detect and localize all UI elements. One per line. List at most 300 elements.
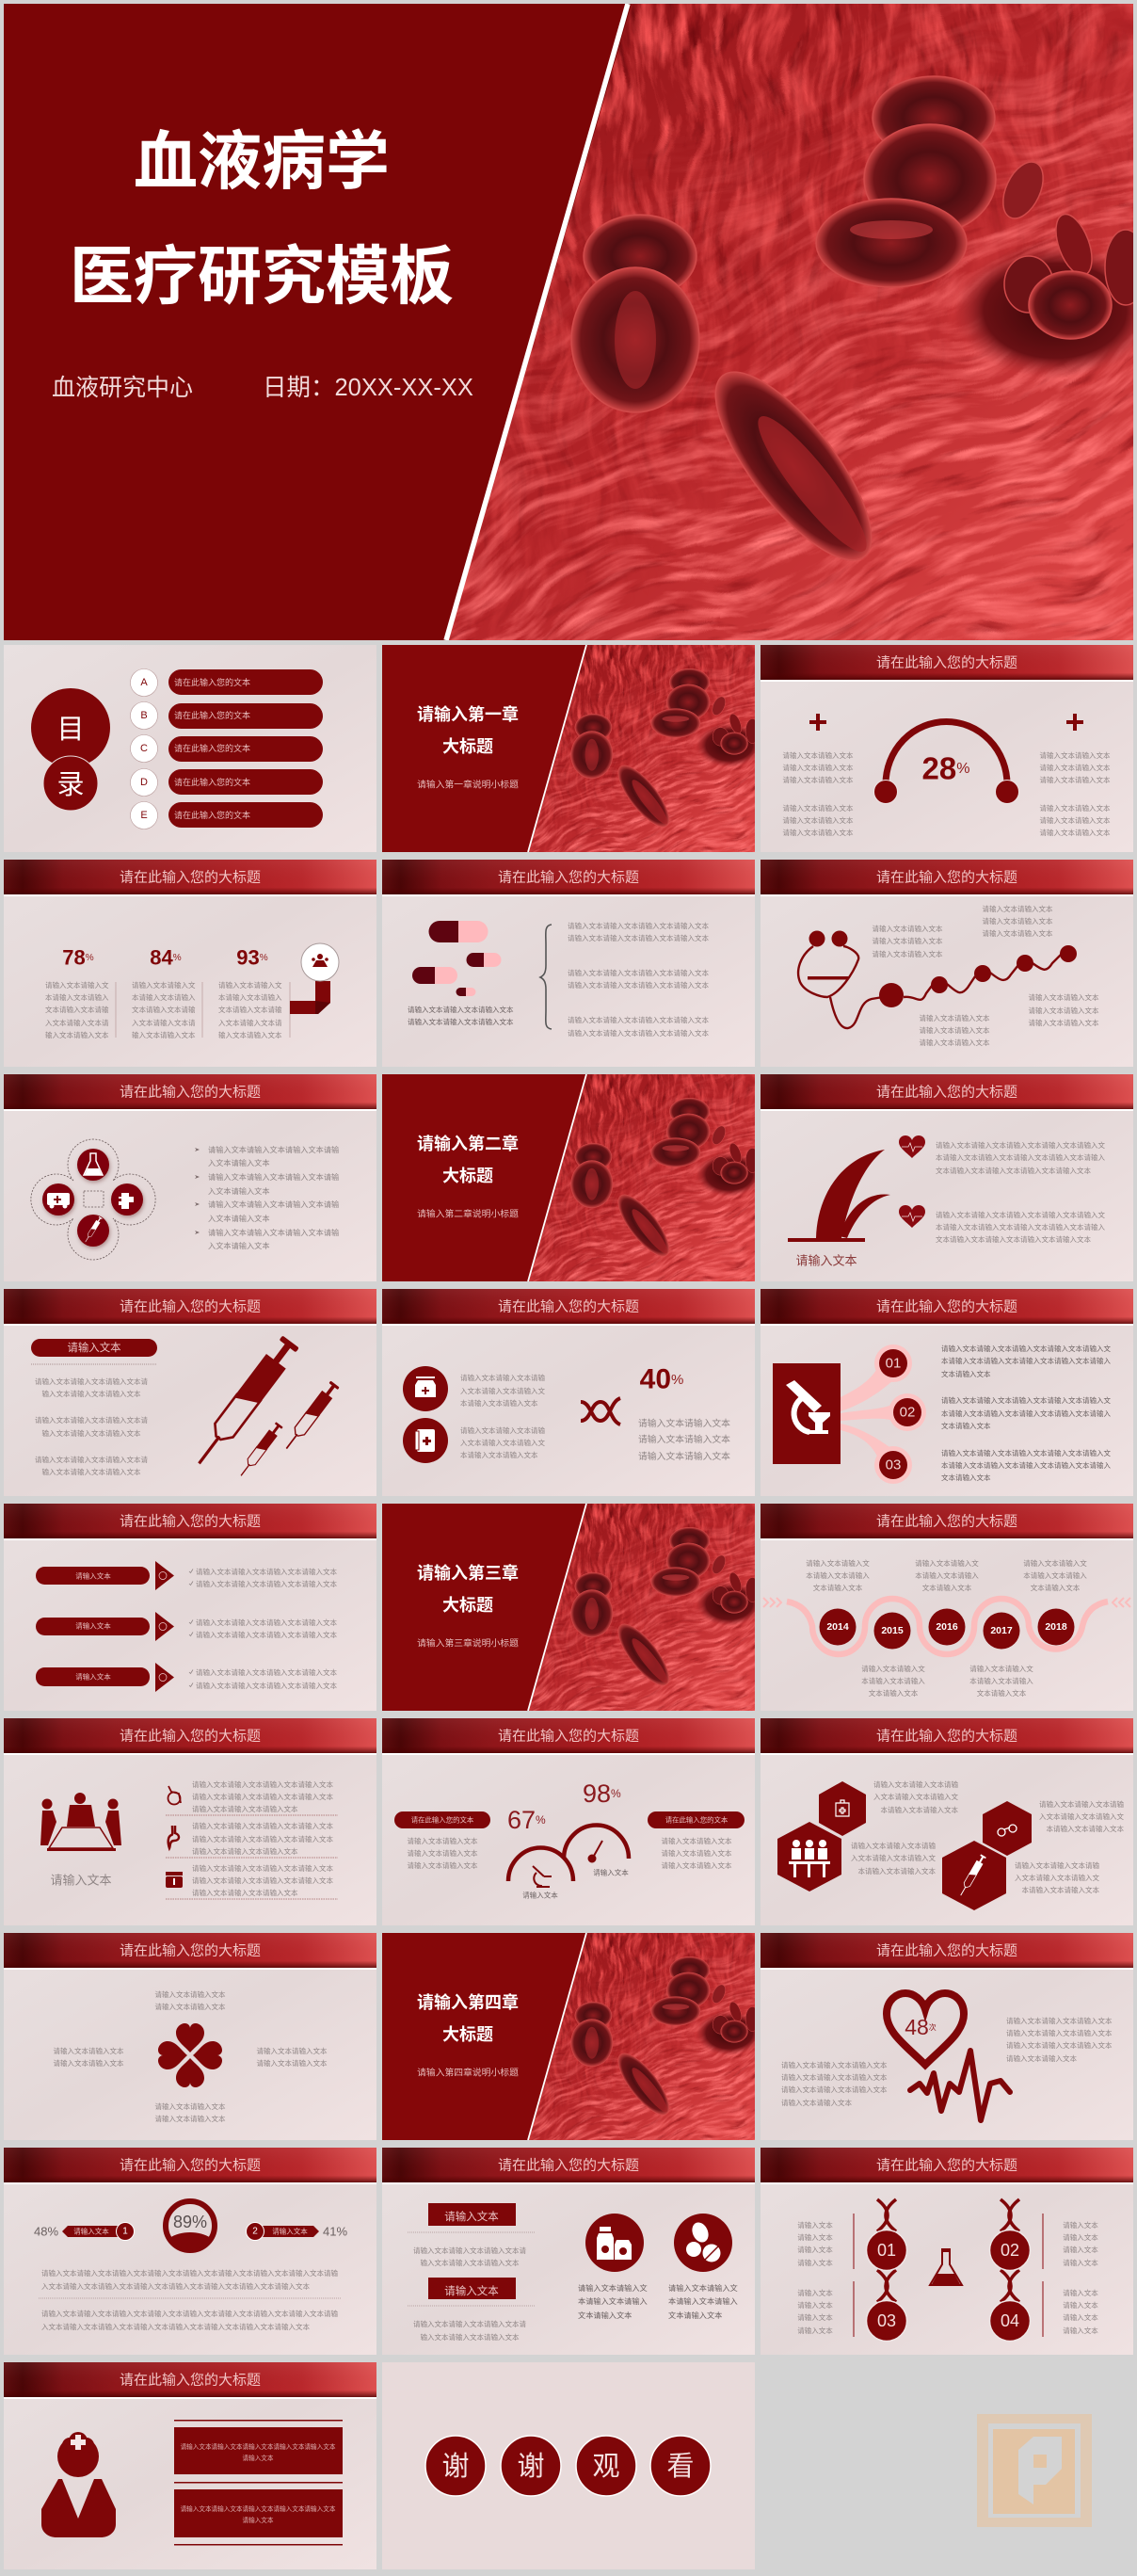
text panel 1: 请输入文本 [243, 2454, 274, 2461]
ribbons [877, 2199, 1019, 2302]
text block 2: 请输入文本请输入文本 [983, 904, 1053, 913]
pills: 请输入文本 [75, 1621, 111, 1631]
text with checks: 请输入文本请输入文本请输入文本请输入文本 [196, 1567, 337, 1576]
text 1: 输入文本请输入文本请输入文本 [420, 2258, 520, 2267]
contents list: 请在此输入您的文本 [174, 710, 250, 720]
header bar: 请在此输入您的大标题 [498, 1729, 639, 1744]
thank-you circles: 谢 [517, 2451, 545, 2482]
text 2: 请输入文本请输入文本请输入文本请 [413, 2318, 526, 2327]
chapter subtitle: 请输入第三章说明小标题 [417, 1636, 519, 1650]
column text [45, 979, 282, 1039]
plus icons [809, 714, 1083, 731]
bottom text: 请输入文本请输入文本 [154, 2113, 226, 2122]
top text: 请输入文本请输入文 [915, 1557, 979, 1567]
percentages: 84% [150, 945, 182, 970]
top text: 本请输入文本请输入 [1023, 1570, 1087, 1580]
label pill: 请输入文本 [68, 1341, 120, 1354]
left text: 请输入文本请输入文本 [407, 1847, 478, 1857]
text with checks: 请输入文本请输入文本请输入文本请输入文本 [196, 1618, 337, 1627]
text: 本请输入文本请输入文本请输入文本请输入文本请输入 [941, 1459, 1111, 1469]
text 2: 输入文本请输入文本请输入文本 [420, 2331, 520, 2341]
header bar: 请在此输入您的大标题 [876, 1729, 1017, 1744]
header bar [761, 860, 1133, 896]
top text: 文本请输入文本 [922, 1582, 972, 1591]
slide: 40 percent [382, 1289, 755, 1496]
bottom text: 文本请输入文本 [869, 1687, 919, 1697]
top text: 文本请输入文本 [813, 1582, 863, 1591]
caption 2: 本请输入文本请输入 [668, 2295, 738, 2305]
percent value: 40% [640, 1363, 683, 1395]
slide: table of contents [4, 645, 376, 852]
caption: 请输入文本请输入文本请输入文本 [408, 1004, 514, 1013]
text panel 1 [174, 2420, 343, 2484]
text panel 2 [174, 2489, 343, 2546]
text: 输入文本请输入文本请输入文本 [41, 1427, 141, 1437]
text: 请输入文本请输入文本请输入文本 [192, 1887, 298, 1896]
slide: clover [4, 1933, 376, 2140]
left text: 请输入文本请输入文本 [783, 749, 854, 759]
contents list: 请在此输入您的文本 [174, 677, 250, 687]
text 1: 请输入文本请输入文本请输入文本请输入文本请输入文 [936, 1139, 1105, 1149]
medal circles: 04 [1001, 2311, 1019, 2330]
contents list [130, 668, 323, 829]
icon: heart 2 [899, 1205, 925, 1228]
text: 文本请输入文本 [941, 1420, 991, 1429]
header bar [761, 2148, 1133, 2184]
right text: 请输入文本请输入文本 [661, 1847, 732, 1857]
paragraph 2: 入文本请输入文本请输入文本请输入文本请输入文本请输入文本请输入文本请输入文本 [41, 2322, 310, 2331]
header bar [4, 1504, 376, 1540]
text: 请输入文本请输入文本请输入文本请输入文本 [192, 1791, 333, 1800]
icon: medical book [403, 1418, 448, 1463]
right text: 请输入文本请输入文本请输入文本 [1006, 2028, 1113, 2037]
icon: people in circle [301, 943, 339, 981]
text block 4: 请输入文本请输入文本 [1028, 992, 1099, 1002]
contents list: 请在此输入您的文本 [174, 743, 250, 753]
year circles: 2014 [826, 1621, 849, 1633]
text block 3: 请输入文本请输入文本 [919, 1013, 990, 1022]
ring gauge [166, 2201, 215, 2250]
right pill [648, 1811, 745, 1828]
right text: 请输入文本请输入文本 [661, 1836, 732, 1845]
percent 67: 67% [507, 1806, 546, 1834]
right tag: 2 [252, 2226, 258, 2237]
thank-you circles: 观 [592, 2452, 620, 2482]
contents list: 请在此输入您的文本 [174, 777, 250, 787]
left text: 请输入文本 [797, 2326, 833, 2335]
text block 4: 请输入文本请输入文本 [1028, 1006, 1099, 1015]
text block 1: 请输入文本请输入文本 [872, 949, 943, 958]
bullet text: 请输入文本请输入文本请输入文本请输 [208, 1171, 339, 1181]
chapter subtitle: 请输入第四章说明小标题 [417, 2066, 519, 2079]
slide: microscope tree [761, 1289, 1133, 1496]
right text: 请输入文本请输入文本 [1039, 815, 1111, 825]
left text: 请输入文本请输入文本 [783, 763, 854, 772]
chapter title: 大标题 [442, 2025, 493, 2044]
photo [529, 1933, 755, 2140]
left text: 请输入文本请输入文本 [407, 1836, 478, 1845]
text 3: 入文本请输入文本请输入文 [1039, 1811, 1124, 1821]
left tag: 48% [34, 2224, 58, 2239]
left text: 请输入文本 [797, 2258, 833, 2267]
left tag [34, 2222, 134, 2241]
dashed outline [31, 1139, 155, 1260]
text with checks: 请输入文本请输入文本请输入文本请输入文本 [196, 1578, 337, 1587]
text: 本请输入文本请输入文本请输入文本请输入文本请输入 [941, 1356, 1111, 1365]
text: 请输入文本请输入文本请输入文本请输入文本 [192, 1834, 333, 1843]
top text: 请输入文本请输入文 [1023, 1557, 1087, 1567]
header bar [761, 1933, 1133, 1970]
right text: 请输入文本 [1063, 2220, 1098, 2230]
text with checks: 请输入文本请输入文本请输入文本请输入文本 [196, 1629, 337, 1638]
left pill: 请在此输入您的文本 [411, 1815, 474, 1825]
text 1: 文本请输入文本请输入文本请输入文本请输入文本 [936, 1166, 1091, 1175]
icon: large syringe [189, 1334, 300, 1471]
header bar: 请在此输入您的大标题 [120, 1299, 261, 1314]
photo: blood vessel with red cells [448, 4, 1133, 640]
text: 请输入文本请输入文本请输入文本 [192, 1804, 298, 1813]
text: 请输入文本请输入文本请输入文本请输入文本 [192, 1779, 333, 1789]
bottom text: 请输入文本请输入文本 [154, 2101, 226, 2111]
header bar [4, 1074, 376, 1111]
left text: 请输入文本请输入文本请输入文本 [781, 2071, 888, 2081]
header bar [4, 2362, 376, 2399]
header bar: 请在此输入您的大标题 [498, 2158, 639, 2173]
column text: 文本请输入文本请输 [218, 1004, 282, 1013]
column text: 入文本请输入文本请 [132, 1017, 196, 1026]
pills: 请输入文本 [75, 1570, 111, 1580]
icon: medical kit [119, 1193, 134, 1209]
chapter title [417, 1992, 519, 2044]
percentages: 93% [236, 945, 268, 970]
hexagon: meeting [777, 1822, 841, 1892]
title [70, 126, 454, 313]
chapter subtitle: 请输入第二章说明小标题 [417, 1207, 519, 1220]
year circles: 2018 [1045, 1621, 1067, 1633]
left tag: 1 [122, 2226, 128, 2237]
branching arrow [788, 1150, 890, 1242]
thank-you circles: 谢 [441, 2451, 470, 2482]
text 4: 入文本请输入文本请输入文 [1015, 1872, 1099, 1881]
numbered circles: 01 [886, 1356, 901, 1371]
column text: 输入文本请输入文本 [218, 1030, 282, 1039]
bullet text: 请输入文本请输入文本请输入文本请输 [208, 1145, 339, 1154]
header bar [382, 2148, 755, 2184]
numbered circles [879, 1349, 921, 1479]
right text: 请输入文本请输入文本请输入文本请输入文本 [568, 968, 709, 977]
photo [529, 645, 755, 852]
left text: 请输入文本请输入文本 [781, 2098, 852, 2107]
text block 2: 请输入文本请输入文本 [983, 928, 1053, 938]
column text: 文本请输入文本请输 [132, 1004, 196, 1013]
text 1: 入文本请输入文本请输入文 [873, 1791, 958, 1800]
text 1: 请输入文本请输入文本请输 [873, 1779, 958, 1789]
right text: 请输入文本请输入文本 [256, 2045, 328, 2054]
paragraph 2: 请输入文本请输入文本请输入文本请输入文本请输入文本请输入文本请输入文本请输入文本请输 [41, 2309, 338, 2318]
top text: 本请输入文本请输入 [915, 1570, 979, 1580]
title: 血液病学 [134, 126, 390, 198]
left text: 请输入文本请输入文本 [783, 774, 854, 783]
left text: 请输入文本 [797, 2312, 833, 2322]
top text: 请输入文本请输入文本 [154, 1988, 226, 1998]
thank-you circles [425, 2436, 711, 2496]
bottom text: 本请输入文本请输入 [969, 1676, 1033, 1685]
text block 4: 请输入文本请输入文本 [1028, 1017, 1099, 1026]
left text: 请输入文本请输入文本 [53, 2045, 124, 2054]
right text: 请输入文本 [1063, 2245, 1098, 2254]
text: 请输入文本请输入文本请输入文本请 [35, 1414, 148, 1424]
top text: 请输入文本请输入文本 [154, 2002, 226, 2011]
header bar: 请在此输入您的大标题 [498, 1299, 639, 1314]
header bar [382, 1718, 755, 1755]
header bar: 请在此输入您的大标题 [120, 2158, 261, 2173]
column text: 请输入文本请输入文 [132, 979, 196, 989]
text: 请输入文本请输入文本请输 [460, 1425, 545, 1435]
caption 1: 文本请输入文本 [578, 2310, 632, 2320]
caption 2: 文本请输入文本 [668, 2310, 722, 2320]
right text: 请输入文本请输入文本请输入文本 [1006, 2039, 1113, 2049]
label pill [31, 1339, 157, 1357]
right text: 请输入文本 [1063, 2258, 1098, 2267]
chapter subtitle: 请输入第一章说明小标题 [417, 778, 519, 791]
header bar [382, 1289, 755, 1326]
arc gauge [873, 721, 1018, 804]
right text: 请输入文本请输入文本 [1039, 827, 1111, 836]
text panel 1: 请输入文本请输入文本请输入文本请输入文本请输入文本 [181, 2442, 336, 2450]
slide: medicine [382, 2148, 755, 2355]
icon: syringe [84, 1216, 103, 1243]
slide: branching arrow [761, 1074, 1133, 1281]
text 2: 文本请输入文本请输入文本请输入文本请输入文本 [936, 1233, 1091, 1243]
slide: pills [382, 860, 755, 1067]
medal circles: 01 [877, 2241, 896, 2260]
text: 输入文本请输入文本请输入文本 [41, 1467, 141, 1476]
left text: 请输入文本 [797, 2231, 833, 2241]
right text: 请输入文本 [1063, 2288, 1098, 2297]
medal circles: 02 [1001, 2241, 1019, 2260]
left text: 请输入文本 [797, 2299, 833, 2309]
arcs [508, 1825, 629, 1881]
text: 输入文本请输入文本请输入文本 [41, 1388, 141, 1397]
header bar: 请在此输入您的大标题 [120, 1943, 261, 1958]
slide: timeline [761, 1504, 1133, 1711]
pink connectors [841, 1344, 926, 1484]
bullet text: 请输入文本请输入文本请输入文本请输 [208, 1199, 339, 1209]
heart value: 48次 [905, 2015, 937, 2039]
text: 请输入文本请输入文本请输入文本请输入文本 [192, 1862, 333, 1872]
header bar: 请在此输入您的大标题 [120, 1514, 261, 1529]
right tag: 41% [323, 2224, 347, 2239]
percent 98: 98% [583, 1779, 621, 1808]
hexagon: glasses [983, 1801, 1032, 1856]
right tag: 请输入文本 [272, 2226, 308, 2235]
thank-you circles: 看 [666, 2451, 695, 2482]
arrows [155, 1561, 174, 1692]
slide: four icons and bullets [4, 1074, 376, 1281]
chapter title [417, 1563, 519, 1615]
year circles [819, 1608, 1075, 1650]
text: 请输入文本请输入文本请输入文本请输入文本请输入文 [941, 1395, 1111, 1405]
right text: 请输入文本 [1063, 2312, 1098, 2322]
paragraph 1: 请输入文本请输入文本请输入文本请输入文本请输入文本请输入文本请输入文本请输入文本请输 [41, 2267, 338, 2277]
top text: 请输入文本请输入文 [806, 1557, 870, 1567]
stethoscope illustration [798, 930, 1077, 1028]
contents list: E [140, 810, 148, 821]
title: 医疗研究模板 [70, 241, 454, 313]
header bar [4, 1718, 376, 1755]
caption 1: 请输入文本请输入文 [578, 2282, 648, 2292]
text block 3: 请输入文本请输入文本 [919, 1024, 990, 1034]
icon: dna [581, 1398, 620, 1425]
text: 请输入文本请输入文本请输入文本请输入文本请输入文 [941, 1343, 1111, 1352]
top text [806, 1557, 1087, 1591]
text 2: 请输入文本请输入文本请输入文本请输入文本请输入文 [936, 1209, 1105, 1218]
right text: 请输入文本请输入文本 [661, 1860, 732, 1870]
left text: 请输入文本请输入文本 [53, 2058, 124, 2068]
bottom text: 文本请输入文本 [977, 1687, 1027, 1697]
hexagon: first aid [819, 1781, 866, 1836]
icon: meeting [40, 1793, 121, 1851]
text: 入文本请输入文本请输入文 [460, 1437, 545, 1446]
right text: 请输入文本请输入文本请输入文本 [1006, 2015, 1113, 2024]
header bar [761, 645, 1133, 682]
right text: 请输入文本 [1063, 2231, 1098, 2241]
brace [540, 925, 552, 1029]
labels: 请输入文本 [593, 1868, 629, 1877]
medal circles: 03 [877, 2311, 896, 2330]
year circles: 2016 [936, 1621, 958, 1633]
icon: thermometer [589, 1841, 602, 1862]
right text: 请输入文本请输入文本请输入文本请输入文本 [568, 979, 709, 989]
text block 3: 请输入文本请输入文本 [919, 1038, 990, 1047]
header bar [4, 2148, 376, 2184]
text: 请输入文本请输入文本请输 [460, 1373, 545, 1382]
right text: 请输入文本请输入文本 [256, 2058, 328, 2068]
left text: 请输入文本 [797, 2245, 833, 2254]
column text: 本请输入文本请输入 [132, 992, 196, 1002]
icon: heart 1 [899, 1135, 925, 1158]
medal circles [866, 2230, 1030, 2341]
text: 请输入文本请输入文本 [638, 1416, 730, 1429]
header bar [4, 860, 376, 896]
chapter title: 大标题 [442, 737, 493, 756]
right text: 请输入文本请输入文本 [1039, 763, 1111, 772]
icon panel: microscope [773, 1363, 841, 1464]
header bar [382, 860, 755, 896]
numbered circles: 02 [900, 1405, 915, 1420]
watermark logo [977, 2414, 1092, 2527]
text: 请输入文本请输入文本请输入文本请 [35, 1377, 148, 1386]
slide: chapter two [382, 1074, 755, 1281]
chapter title: 大标题 [442, 1596, 493, 1615]
text 4: 本请输入文本请输入文本 [1022, 1885, 1099, 1894]
text block 1: 请输入文本请输入文本 [872, 923, 943, 932]
header bar: 请在此输入您的大标题 [876, 1514, 1017, 1529]
text 1: 本请输入文本请输入文本 [881, 1804, 958, 1813]
caption 1: 本请输入文本请输入 [578, 2295, 648, 2305]
header bar: 请在此输入您的大标题 [498, 870, 639, 885]
header bar: 请在此输入您的大标题 [876, 1085, 1017, 1100]
pills [36, 1567, 150, 1686]
contents list: A [140, 677, 148, 688]
slide: heart rate [761, 1933, 1133, 2140]
slide: numbered medals [761, 2148, 1133, 2355]
hexagon: syringe [942, 1841, 1006, 1910]
contents list: B [140, 710, 148, 721]
bottom text [861, 1663, 1033, 1697]
heading circles: 目 [56, 715, 85, 745]
text 2: 请输入文本请输入文本请输 [851, 1840, 936, 1849]
bullet text: 入文本请输入文本 [208, 1241, 270, 1250]
arrow bullets [195, 1148, 200, 1234]
icon: ambulance [47, 1193, 70, 1209]
right text: 请输入文本请输入文本请输入文本请输入文本 [568, 932, 709, 942]
text 3: 本请输入文本请输入文本 [1047, 1823, 1124, 1832]
left pill [394, 1811, 490, 1828]
chapter title [417, 704, 519, 756]
right text: 请输入文本请输入文本 [1039, 774, 1111, 783]
right text: 请输入文本 [1063, 2326, 1098, 2335]
text panel 2: 请输入文本 [243, 2516, 274, 2523]
header bar: 请在此输入您的大标题 [876, 870, 1017, 885]
label box 1 [428, 2203, 516, 2226]
text 1: 本请输入文本请输入文本请输入文本请输入文本请输入 [936, 1152, 1105, 1162]
text: 请输入文本请输入文本 [638, 1450, 730, 1461]
top text: 本请输入文本请输入 [806, 1570, 870, 1580]
slide: 89 percent ring [4, 2148, 376, 2355]
left text: 请输入文本请输入文本 [783, 827, 854, 836]
column text: 本请输入文本请输入 [45, 992, 109, 1002]
header bar [761, 1074, 1133, 1111]
text block 2: 请输入文本请输入文本 [983, 915, 1053, 925]
column text: 入文本请输入文本请 [45, 1017, 109, 1026]
icon: nurse [41, 2432, 116, 2537]
slide: meeting [4, 1718, 376, 1925]
label box 1: 请输入文本 [444, 2210, 499, 2223]
header bar: 请在此输入您的大标题 [876, 1943, 1017, 1958]
icon: flask [84, 1153, 103, 1175]
bullet text: 入文本请输入文本 [208, 1158, 270, 1167]
slide: stethoscope [761, 860, 1133, 1067]
contents list: 请在此输入您的文本 [174, 810, 250, 820]
left tag: 请输入文本 [73, 2226, 109, 2235]
icon: medicine jar [403, 1366, 448, 1411]
slide: hexagons [761, 1718, 1133, 1925]
text panel 2: 请输入文本请输入文本请输入文本请输入文本请输入文本 [181, 2504, 336, 2512]
left text: 请输入文本 [797, 2220, 833, 2230]
text: 请输入文本请输入文本请输入文本请 [35, 1454, 148, 1463]
pipe shape [290, 981, 330, 1014]
column text: 输入文本请输入文本 [45, 1030, 109, 1039]
heading circles: 录 [56, 770, 85, 800]
bottom text: 本请输入文本请输入 [861, 1676, 925, 1685]
contents list: C [140, 743, 148, 754]
icon: heart outline [887, 1993, 964, 2065]
column text: 入文本请输入文本请 [218, 1017, 282, 1026]
numbered circles: 03 [886, 1457, 901, 1473]
bottom text: 请输入文本请输入文 [861, 1663, 925, 1672]
top text: 文本请输入文本 [1031, 1582, 1081, 1591]
labels [522, 1868, 629, 1900]
percentages: 78% [62, 945, 94, 970]
arrow label: 请输入文本 [795, 1254, 857, 1267]
text 2: 本请输入文本请输入文本 [858, 1866, 936, 1876]
slide: syringes [4, 1289, 376, 1496]
right tag [247, 2222, 347, 2241]
text: 文本请输入文本 [941, 1473, 991, 1482]
header bar: 请在此输入您的大标题 [876, 2158, 1017, 2173]
paragraph 1: 入文本请输入文本请输入文本请输入文本请输入文本请输入文本请输入文本请输入文本 [41, 2280, 310, 2290]
